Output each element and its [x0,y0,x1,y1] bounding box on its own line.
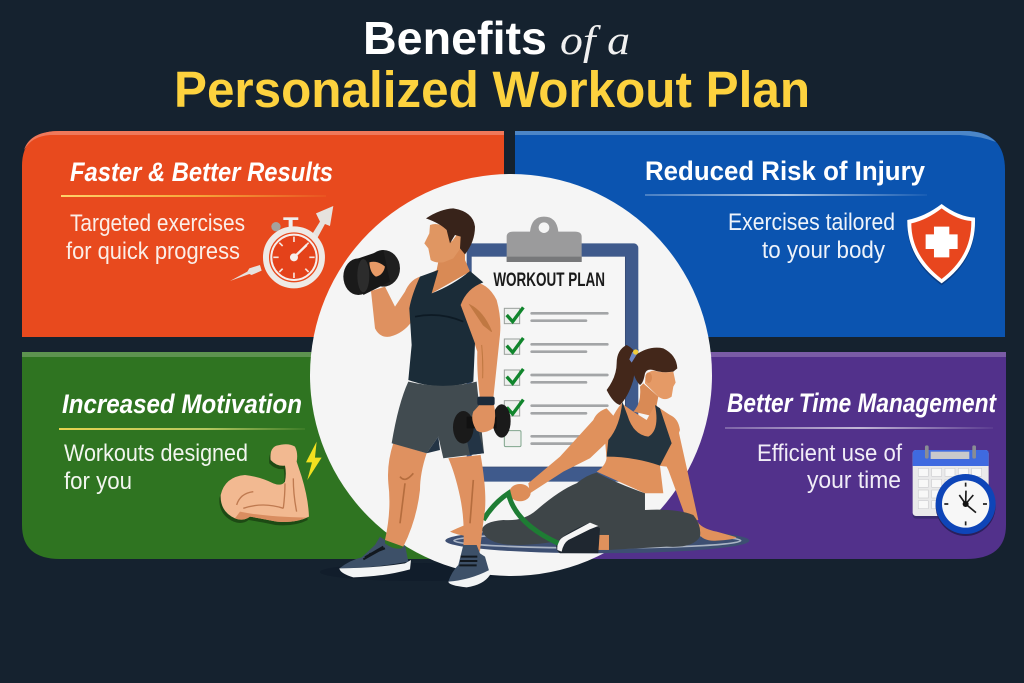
panel: faster and better results: Targeted exercises [70,210,245,237]
panel: reduced risk of injury [515,131,1005,337]
panel: faster and better results: for quick progress [66,238,240,265]
title [174,12,810,118]
wrist watch [477,397,495,405]
sports top [607,402,672,466]
panel: faster and better results [22,131,504,337]
woman shoe [556,523,600,553]
panel: better time management: Efficient use of [757,440,902,467]
icon: flexed arm with lightning [219,442,322,525]
icon: calendar and clock [913,445,996,536]
panel: increased motivation: Workouts designed [64,440,248,467]
raised dumbbell [343,250,400,295]
panel: reduced risk of injury: Reduced Risk of Injury [645,156,925,186]
title: Personalized Workout Plan [174,61,810,118]
title: of a [560,17,630,63]
panel: increased motivation: for you [64,468,132,495]
panel: increased motivation: Increased Motivation [62,389,302,419]
icon: workout plan clipboard [467,217,638,482]
panel: increased motivation [22,352,520,559]
panel: reduced risk of injury: to your body [762,237,885,264]
leggings [482,473,700,550]
panel: better time management: your time [807,467,901,494]
title: Benefits [363,12,547,64]
icon: stopwatch with arrow [230,206,333,285]
central white circle [310,174,712,576]
checklist [504,307,607,447]
figure: woman stretching [445,345,749,553]
panel: faster and better results: Faster & Better Results [70,157,333,187]
shorts [392,382,484,458]
figure: man with dumbbells [343,208,511,552]
panel: better time management [520,352,1006,559]
icon: workout plan clipboard: WORKOUT PLAN [493,270,605,291]
panel: reduced risk of injury: Exercises tailored [728,209,895,236]
resistance band [483,493,558,543]
floor shadow [320,563,520,581]
woman upper body [605,345,680,467]
lower dumbbell [453,404,511,444]
exercise mat [445,528,749,553]
shoes [339,537,490,587]
icon: shield with cross [907,204,975,285]
man upper body [343,208,500,398]
